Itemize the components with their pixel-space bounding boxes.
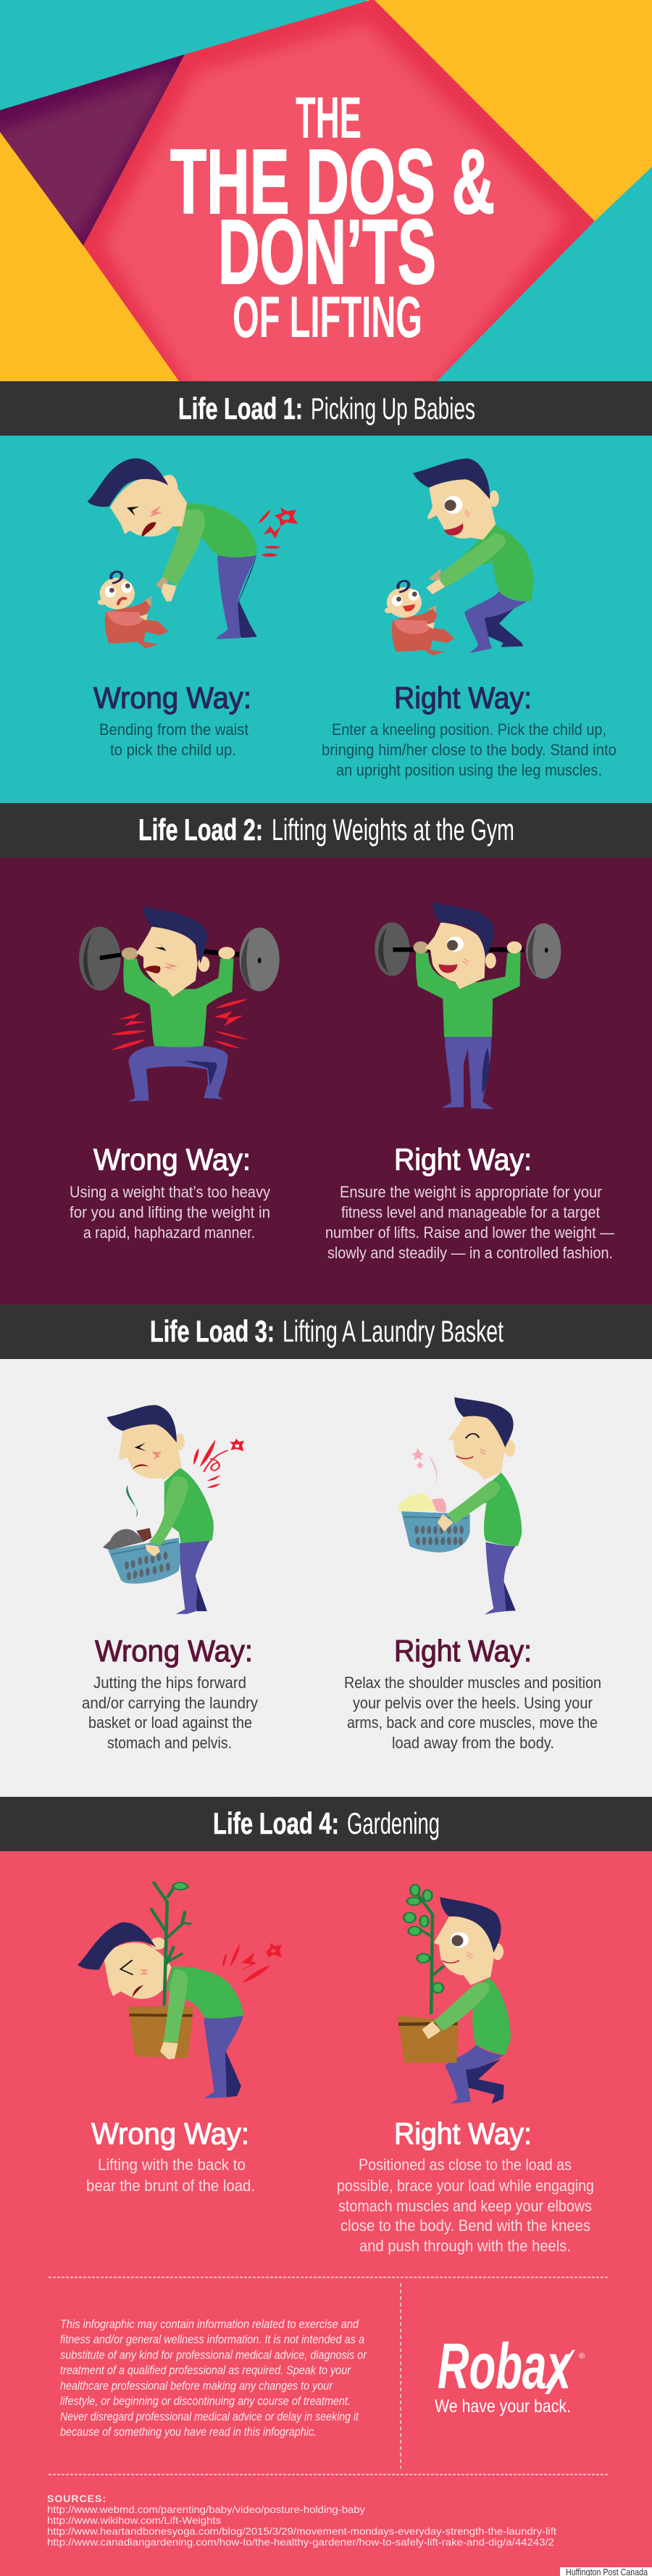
sources: [47, 2493, 556, 2548]
disclaimer: This infographic may contain information related to exercise and: [60, 2317, 359, 2331]
right way text: and push through with the heels.: [359, 2237, 571, 2255]
wrong way text: Bending from the waist: [99, 720, 249, 739]
right way text: bringing him/her close to the body. Stand into: [322, 741, 617, 759]
pain marks: [258, 507, 298, 557]
sources: SOURCES:: [47, 2493, 106, 2504]
wrong way text: Wrong Way:: [93, 1142, 251, 1176]
wrong way text: Jutting the hips forward: [93, 1674, 246, 1692]
right way text: Right Way:: [394, 2116, 532, 2151]
disclaimer: treatment of a qualified professional as required. Speak to your: [60, 2363, 351, 2377]
right way text: Enter a kneeling position. Pick the child up,: [332, 720, 606, 739]
right way text: Relax the shoulder muscles and position: [344, 1674, 601, 1692]
section bar: life load 3: Life Load 3:: [150, 1314, 275, 1348]
title: [170, 86, 495, 350]
right way text: Positioned as close to the load as: [359, 2156, 572, 2174]
right way text: load away from the body.: [392, 1734, 554, 1752]
wrong way text: Wrong Way:: [93, 681, 251, 715]
wrong way text: Using a weight that’s too heavy: [70, 1183, 271, 1201]
title: THE: [296, 86, 361, 151]
plant pot: [128, 2006, 193, 2058]
sources: http://www.canadiangardening.com/how-to/the-healthy-gardener/how-to-safely-lift-rake-and-dig/a/44243/2: [47, 2536, 554, 2548]
shape: central pink hexagon: [83, 0, 595, 395]
right way text: slowly and steadily — in a controlled fashion.: [327, 1244, 613, 1262]
figure: wrong way man with laundry basket: [103, 1405, 244, 1614]
wrong way text: to pick the child up.: [110, 741, 236, 759]
plant pot: [398, 2016, 459, 2063]
section bar: life load 3: Lifting A Laundry Basket: [283, 1314, 503, 1348]
sources: http://www.webmd.com/parenting/baby/video/posture-holding-baby: [47, 2504, 365, 2515]
wrong way text: and/or carrying the laundry: [82, 1694, 259, 1712]
section bar: life load 4: Gardening: [347, 1806, 440, 1840]
shape: top-right yellow: [366, 0, 652, 221]
logo: Robax: We have your back.: [435, 2396, 571, 2417]
right way text: Ensure the weight is appropriate for your: [340, 1183, 602, 1201]
disclaimer: [60, 2317, 367, 2438]
section bar: life load 4: Life Load 4:: [213, 1806, 339, 1840]
right way text: [325, 1142, 614, 1262]
panel: gardening: [0, 1851, 652, 2576]
figure: right way man lifting plant: [398, 1885, 511, 2103]
wrong way text: for you and lifting the weight in: [70, 1203, 270, 1221]
disclaimer: Never disregard professional medical advice or delay in seeking it: [60, 2409, 359, 2424]
figure: wrong way man bending to lift plant: [78, 1882, 282, 2098]
right way text: Right Way:: [394, 1142, 532, 1176]
right way text: your pelvis over the heels. Using your: [353, 1694, 593, 1712]
wrong way text: [93, 681, 251, 759]
section bar: life load 3: [0, 1305, 652, 1359]
plant stem and leaves: [151, 1882, 191, 2006]
right way text: [337, 2116, 594, 2255]
right way text: an upright position using the leg muscles.: [336, 761, 602, 779]
title: OF LIFTING: [233, 285, 422, 350]
right way text: number of lifts. Raise and lower the weight —: [325, 1223, 614, 1242]
section bar: life load 4: [0, 1797, 652, 1851]
panel: lifting a laundry basket: [0, 1359, 652, 1797]
shape: left yellow: [0, 132, 192, 381]
wrong way text: [86, 2116, 255, 2195]
laundry: dirty: [103, 1528, 152, 1550]
section bar: life load 2: Lifting Weights at the Gym: [272, 813, 514, 847]
right way text: Right Way:: [394, 1634, 532, 1668]
title: DON’TS: [218, 201, 436, 303]
right way text: [322, 681, 617, 779]
disclaimer: healthcare professional before making any changes to your: [60, 2379, 333, 2393]
wrong way text: [70, 1142, 271, 1242]
figure: wrong way man bending over baby: [88, 458, 298, 649]
wrong way text: a rapid, haphazard manner.: [83, 1223, 255, 1242]
panel: picking up babies: [0, 436, 652, 803]
right way text: possible, brace your load while engaging: [337, 2177, 594, 2195]
pain marks: [193, 1439, 244, 1488]
logo: Robax: ®: [579, 2352, 585, 2361]
section bar: life load 1: Life Load 1:: [178, 391, 303, 425]
logo: Robax: Robax: [438, 2330, 572, 2402]
right way text: [344, 1634, 601, 1752]
logo: Robax: [435, 2330, 585, 2417]
wrong way text: Wrong Way:: [91, 2116, 249, 2151]
laundry: clean: [397, 1494, 446, 1513]
wrong way text: basket or load against the: [88, 1713, 252, 1732]
shape: purple triangle: [0, 54, 185, 246]
wrong way text: [82, 1634, 259, 1752]
disclaimer: lifestyle, or beginning or discontinuing any course of treatment.: [60, 2394, 351, 2408]
sources: http://www.wikihow.com/Lift-Weights: [47, 2514, 221, 2526]
right way text: Right Way:: [394, 681, 532, 715]
panel: lifting weights at the gym: [0, 857, 652, 1305]
wrong way text: stomach and pelvis.: [107, 1734, 232, 1752]
right way text: arms, back and core muscles, move the: [347, 1713, 598, 1732]
figure: wrong way man with barbell: [79, 907, 280, 1102]
right way text: fitness level and manageable for a target: [341, 1203, 601, 1221]
basket: [401, 1511, 470, 1553]
panel: title header: [0, 0, 652, 395]
pain marks: [111, 999, 248, 1050]
disclaimer: substitute of any kind for professional medical advice, diagnosis or: [60, 2348, 367, 2361]
basket: [108, 1537, 180, 1584]
baby: crying: [98, 572, 168, 649]
figure: right way man with barbell: [375, 902, 561, 1109]
disclaimer: because of something you have read in this infographic.: [60, 2425, 317, 2438]
section bar: life load 1: Picking Up Babies: [311, 391, 475, 425]
plant stem and leaves: [404, 1885, 444, 2014]
wrong way text: Wrong Way:: [95, 1634, 253, 1668]
section bar: life load 2: [0, 803, 652, 857]
sources: http://www.heartandbonesyoga.com/blog/2015/3/29/movement-mondays-everyday-strength-the-laundry-lift: [47, 2525, 556, 2537]
figure: right way man with laundry basket: [397, 1397, 522, 1614]
section bar: life load 2: Life Load 2:: [138, 813, 263, 847]
disclaimer: fitness and/or general wellness information. It is not intended as a: [60, 2332, 364, 2346]
right way text: close to the body. Bend with the knees: [340, 2216, 590, 2235]
wrong way text: Lifting with the back to: [98, 2156, 246, 2174]
wrong way text: bear the brunt of the load.: [86, 2177, 255, 2195]
section bar: life load 1: [0, 381, 652, 436]
baby: happy: [385, 581, 454, 655]
figure: right way man kneeling to baby: [385, 459, 533, 655]
pain marks: [222, 1943, 282, 1983]
right way text: stomach muscles and keep your elbows: [338, 2197, 592, 2215]
